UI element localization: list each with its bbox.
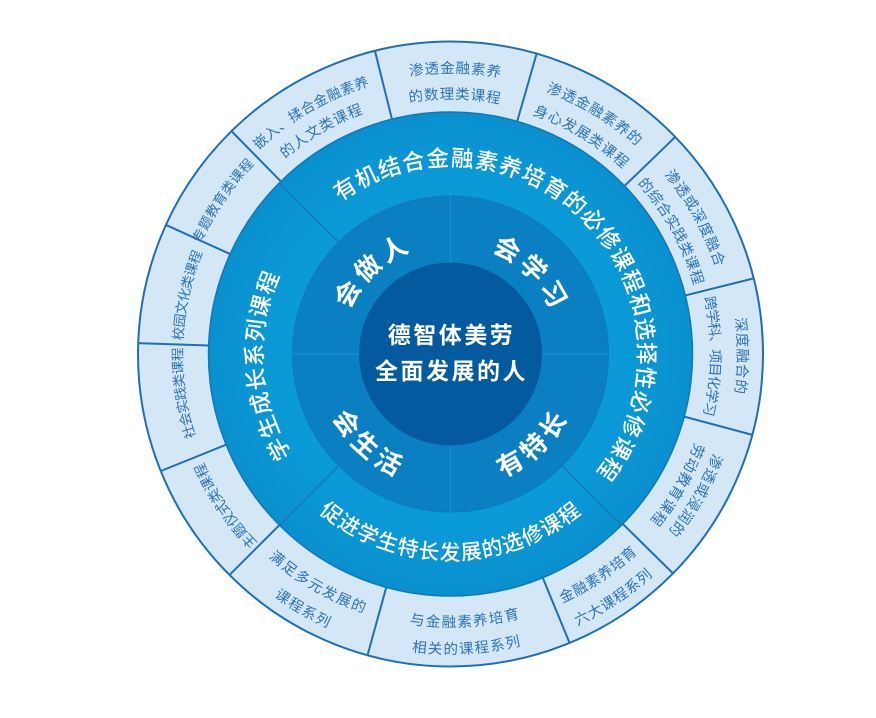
label: 社会实践类课程: 社会实践类课程 xyxy=(171,348,196,439)
label: 人文类课程: 嵌入、揉合金融素养 xyxy=(252,76,368,150)
label: 数理类课程: 的数理类课程 xyxy=(409,87,500,104)
label: 人文类课程: 的人文类课程 xyxy=(280,102,363,158)
label: 相关的课程系列: 与金融素养培育 xyxy=(410,608,518,628)
center title: 德智体美劳 xyxy=(388,322,515,348)
middle ring xyxy=(208,112,692,596)
outer ring: curriculum items xyxy=(138,42,763,666)
label: 数理类课程 xyxy=(409,60,500,104)
center circle xyxy=(359,262,542,446)
center title xyxy=(375,322,528,384)
label: 身心发展类课程: 身心发展类课程 xyxy=(532,105,630,169)
label: 多元发展课程系列: 课程系列 xyxy=(276,588,332,628)
label: 六大课程系列 xyxy=(560,546,652,626)
label: 六大课程系列: 六大课程系列 xyxy=(574,567,652,626)
label: 相关的课程系列: 相关的课程系列 xyxy=(412,634,520,655)
label: 六大课程系列: 金融素养培育 xyxy=(560,546,636,604)
inner ring xyxy=(292,196,608,512)
label: 跨学科项目化学习: 深度融合的 xyxy=(734,318,750,394)
label: 专题教育类课程: 专题教育类课程 xyxy=(193,158,254,240)
heading: 学生成长系列课程: 学生成长系列课程 xyxy=(244,270,290,462)
label: 相关的课程系列 xyxy=(410,608,520,655)
label: 主题仪式类课程: 主题仪式类课程 xyxy=(194,462,258,548)
label: 跨学科项目化学习 xyxy=(703,296,750,416)
label: 综合实践类课程: 的综合实践类课程 xyxy=(638,178,705,286)
heading: 必修课程: 有机结合金融素养培育的必修课程和选择性必修课程 xyxy=(332,147,658,482)
heading: 选修课程: 促进学生特长发展的选修课程 xyxy=(320,500,582,562)
sector: 有特长: 有特长 xyxy=(495,411,568,477)
chart: circular rings xyxy=(137,40,764,668)
label: 多元发展课程系列: 满足多元发展的 xyxy=(269,550,366,613)
label: 跨学科项目化学习: 跨学科、项目化学习 xyxy=(703,296,722,416)
label: 身心发展类课程 xyxy=(532,81,642,169)
sector: 会学习: 会学习 xyxy=(494,238,568,306)
label: 身心发展类课程: 渗透金融素养的 xyxy=(546,81,642,145)
label: 综合实践类课程: 渗透或深度融合 xyxy=(664,168,725,265)
center title: 全面发展的人 xyxy=(375,358,528,384)
label: 劳动教育课程: 渗透或浸润的 xyxy=(669,454,724,537)
label: 数理类课程: 渗透金融素养 xyxy=(410,60,500,78)
label: 劳动教育课程: 劳动教育课程 xyxy=(650,443,705,527)
sector: 会做人: 会做人 xyxy=(336,237,409,308)
sector: 会生活: 会生活 xyxy=(332,410,404,478)
label: 校园文化类课程: 校园文化类课程 xyxy=(172,250,203,340)
